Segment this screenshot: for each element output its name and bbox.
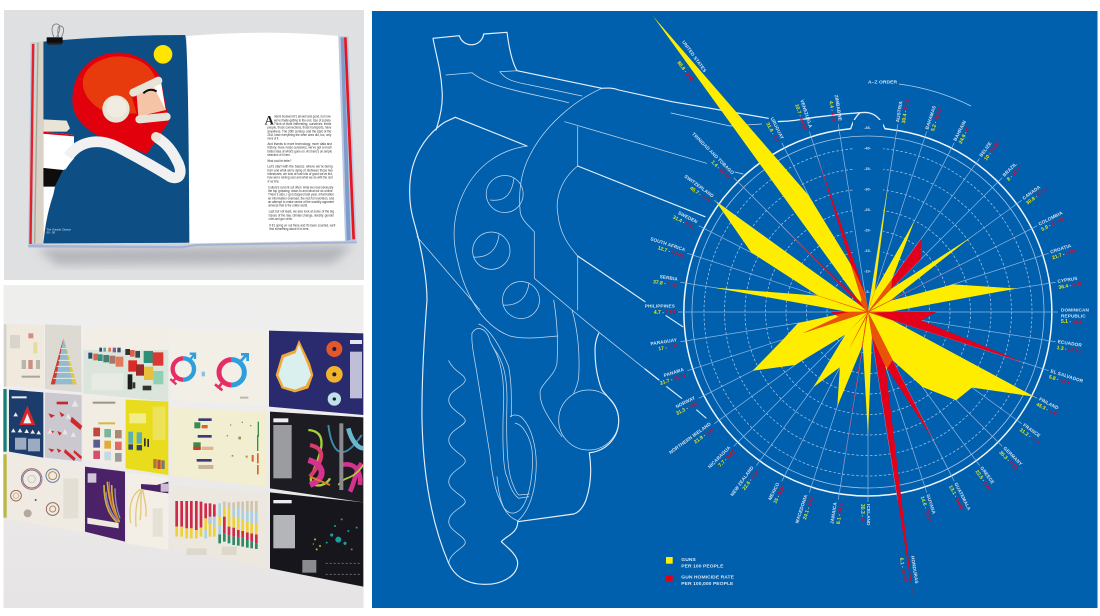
label: Bahamas: BAHAMAS [924, 105, 937, 130]
country labels [645, 40, 1089, 586]
label: Nicaragua [707, 445, 737, 474]
label: Canada: CANADA [1022, 184, 1042, 201]
label: Guatemala: GUATEMALA [953, 482, 972, 512]
label: Iceland [859, 504, 871, 526]
label: Brazil: BRAZIL [1002, 162, 1018, 178]
label: Venezuela [792, 99, 813, 131]
gun thin details [417, 71, 762, 563]
label: Guyana: 14.6 - 13.14 [919, 496, 933, 523]
label: Brazil [1002, 162, 1023, 183]
icon: binder clip [47, 24, 64, 45]
A-Z order arrow: A–Z ORDER [868, 80, 898, 86]
label: Paraguay [650, 337, 679, 354]
label: Macedonia: 24.1 - 1.27 [802, 496, 815, 521]
label: Bahamas [924, 105, 944, 132]
label: El Salvador: 5.8 - 39.9 [1048, 374, 1070, 386]
label: Ecuador [1056, 339, 1083, 355]
label: Croatia [1050, 242, 1076, 261]
label: Mexico [767, 481, 787, 505]
label: Northern Ireland: NORTHERN IRELAND [668, 421, 712, 455]
label: Serbia [653, 273, 679, 289]
label: Zimbabwe: 4.4 - 4.78 [827, 101, 837, 123]
text block: book copy: better idea of what's gone on. As there's an ample [267, 149, 332, 153]
text block: book copy: selection of it here. [267, 153, 291, 157]
label: Panama: PANAMA [663, 367, 685, 378]
label: New Zealand: NEW ZEALAND [730, 465, 755, 497]
text block: book copy [265, 114, 336, 231]
label: France [1018, 422, 1045, 446]
label: Belize [978, 137, 1002, 162]
text block: book copy: Let's start with the basics: where we're being [267, 165, 333, 169]
label: Macedonia: MACEDONIA [794, 494, 809, 524]
label: Austria: AUSTRIA [895, 100, 903, 123]
label: Bahrain: 24.8 - 0 [958, 127, 971, 145]
label: Canada [1022, 183, 1048, 206]
wall sheets, right half [170, 330, 363, 587]
label: Austria: 30.4 - 0.22 [901, 99, 911, 124]
label: Paraguay: PARAGUAY [650, 337, 678, 346]
dashed value rings [704, 148, 1032, 476]
illustration: astronaut: The Outside Chance [47, 227, 72, 231]
text block: book copy: how we're ruining ours and what we do with the rest [267, 176, 333, 180]
label: Uruguay: 31.8 - 3.4 [764, 122, 779, 143]
legend [666, 557, 735, 587]
illustration: revolver line drawing [410, 32, 885, 584]
text block: book copy: Culture's current out often: what we read obviously [268, 185, 334, 189]
label: Jamaica [829, 501, 845, 526]
text block: book copy: There's also, I got stopped last year, information [268, 193, 334, 197]
label: Bahrain: BAHRAIN [952, 119, 967, 142]
label: Croatia: CROATIA [1050, 243, 1072, 255]
label: Trinidad and Tobago: TRINIDAD AND TOBAGO [691, 131, 735, 176]
label: Germany: 30.3 - 0.19 [997, 450, 1019, 471]
label: Canada: 30.8 - 0.51 [1025, 187, 1048, 206]
label: Nicaragua: 7.7 - 5.92 [717, 449, 737, 469]
text block: book copy: anywhere. The 20th century, and the start of the [267, 129, 331, 133]
sheets: dark dot map [270, 492, 363, 587]
panel: book photo [4, 10, 364, 280]
sheets: stacked bar chart [172, 485, 267, 568]
gun bright outline [410, 32, 885, 584]
wall sheets, left half [3, 323, 170, 550]
label: Colombia: COLOMBIA [1038, 210, 1064, 227]
label: Sweden: SWEDEN [677, 210, 699, 225]
label: New Zealand: 22.6 - 0.16 [741, 469, 761, 492]
radial axes [678, 124, 1058, 502]
label: Germany: GERMANY [1002, 446, 1024, 467]
label: France: 31.2 - 0.06 [1018, 427, 1041, 446]
label: Venezuela: 10.7 - 38.97 [793, 103, 807, 131]
sheets: gender symbols [170, 330, 265, 407]
label: Guyana: GUYANA [925, 494, 937, 515]
text block: book copy: an information overload, the rest for invention, and [268, 196, 334, 200]
label: Macedonia [794, 494, 815, 526]
label: South Africa: 12.7 - 17.03 [657, 245, 684, 259]
label: Serbia: 37.8 - 0.46 [653, 279, 677, 289]
text block: book copy: Last but not least, we also look at some of the big [269, 210, 334, 214]
label: Cyprus: CYPRUS [1057, 276, 1078, 284]
label: Northern Ireland: 21.9 - 0.26 [693, 426, 716, 445]
text block: book copy: If it's going on out there and it's been counted, we'll [269, 223, 336, 227]
label: Cyprus [1057, 275, 1083, 291]
radar: gun homicide rate [787, 160, 1025, 599]
label: Honduras [898, 556, 919, 586]
sheets: dark ribbon chart [270, 412, 363, 502]
label: Serbia: SERBIA [659, 274, 679, 282]
label: Greece: 22.5 - 0.26 [974, 469, 993, 492]
label: Zimbabwe: ZIMBABWE [834, 94, 843, 121]
label: Dominican Republic: 5.1 - 16.3 [1061, 319, 1082, 325]
label: Germany [997, 446, 1024, 472]
sheets: dark polar chart [269, 331, 363, 415]
label: United States: 88.8 - 2.97 [676, 60, 695, 83]
label: Jamaica: 8.1 - 39.4 [836, 503, 845, 525]
legend: GUN HOMICIDE RATE [681, 574, 735, 580]
axis scale numbers: -35- [864, 167, 872, 171]
label: Philippines [645, 304, 675, 316]
label: Nicaragua: NICARAGUA [707, 445, 732, 469]
sheets row 2 [3, 389, 168, 475]
label: Greece: GREECE [979, 466, 995, 485]
text block: book copy: the top grossing, down to and what we do online. [268, 189, 333, 193]
panel: revolver radar chart [372, 11, 1098, 608]
label: Panama [658, 367, 687, 387]
radar: guns per 100 people [653, 16, 1034, 437]
label: Jamaica: JAMAICA [829, 501, 838, 524]
text block: book copy: an attempt to make sense of the wonkily apparent [268, 200, 334, 204]
axis scale numbers: -45- [864, 126, 872, 130]
text block: book copy: born and what we're dying of. Between those two [267, 168, 333, 172]
label: Ecuador: ECUADOR [1057, 339, 1083, 348]
label: Zimbabwe [827, 94, 843, 123]
label: Belize: BELIZE [978, 141, 993, 158]
label: Philippines: 4.7 - 8.93 [654, 310, 675, 316]
text block: book copy: A [265, 114, 275, 128]
label: Dominican Republic [1061, 308, 1089, 325]
text block: book copy: issues of the day: climate change, obesity, gender [269, 213, 335, 217]
text block: book copy: we're finally getting to the end. Use of society [274, 118, 331, 122]
legend: PER 100 PEOPLE [681, 564, 724, 570]
label: Colombia [1038, 210, 1067, 233]
label: Finland [1035, 396, 1062, 418]
label: Norway: 31.3 - 0.05 [675, 401, 699, 417]
axis scale numbers [864, 126, 872, 294]
illustration: astronaut [40, 33, 193, 247]
text block: book copy: ndent bookworm's all well and good, but now [274, 115, 331, 119]
legend: GUNS [681, 557, 696, 563]
text block: book copy: Think of most interesting, ourselves, these [274, 122, 331, 126]
axis scale numbers: -20- [864, 228, 872, 232]
axis scale numbers: -15- [864, 249, 872, 253]
label: Iceland: ICELAND [866, 504, 871, 526]
text block: book copy: more of it. [267, 137, 279, 141]
axis scale numbers: -5- [865, 290, 871, 294]
label: France: FRANCE [1022, 422, 1041, 438]
label: Cyprus: 36.4 - 0.46 [1058, 281, 1083, 291]
label: El Salvador [1048, 368, 1084, 391]
label: Austria [895, 98, 911, 124]
label: Bahamas: 5.2 - 15.37 [930, 107, 943, 132]
label: South Africa: SOUTH AFRICA [650, 236, 686, 253]
label: Croatia: 21.7 - 0.39 [1052, 248, 1076, 261]
sheets row 3 [3, 453, 168, 550]
text block: book copy: find something about it in here. [269, 227, 309, 231]
label: El Salvador: EL SALVADOR [1050, 368, 1084, 384]
label: Switzerland: SWITZERLAND [683, 174, 715, 199]
label: South Africa [648, 236, 686, 259]
label: United States [667, 40, 707, 83]
label: Paraguay: 17 - 7.35 [658, 343, 679, 352]
outer white ring [684, 129, 1052, 496]
label: Norway: NORWAY [675, 395, 697, 409]
text block: book copy: 21st, have everything the other ones did, too, only [267, 133, 332, 137]
label: Panama: 21.7 - 16.16 [659, 373, 687, 387]
radar: overlap of guns and homicide [804, 264, 893, 368]
label: Dominican Republic: REPUBLIC [1061, 313, 1086, 318]
label: Mexico: MEXICO [767, 481, 780, 501]
label: Philippines: PHILIPPINES [645, 304, 675, 309]
label: Iceland: 30.3 - 0 [859, 504, 865, 521]
text block: book copy: roles and gun crime. [269, 217, 293, 221]
axis scale numbers: -40- [864, 146, 872, 150]
panel: gallery wall photo [3, 285, 363, 608]
label: Ecuador: 1.3 - 12.73 [1056, 345, 1081, 355]
label: Greece [974, 466, 997, 492]
label: Finland: 45.3 - 0.45 [1035, 402, 1059, 418]
label: Switzerland: 45.7 - 0.77 [688, 185, 711, 205]
label: Trinidad and Tobago: 1.4 - 27.31 [710, 159, 731, 181]
label: Norway [672, 395, 700, 417]
label: Uruguay [763, 116, 785, 144]
text block: book copy: What could be better? [267, 159, 291, 163]
label: Venezuela: VENEZUELA [799, 99, 813, 129]
label: Switzerland [679, 174, 715, 205]
label: Guatemala: 13.1 - 34.81 [947, 484, 965, 511]
sheets row 1 [4, 323, 170, 402]
sheets: cream dot chart [172, 408, 267, 488]
label: Sweden [671, 209, 699, 231]
axis scale numbers: -30- [864, 188, 872, 192]
text block: book copy: milestones, we look at how lots of good we've led, [267, 172, 333, 176]
chart grid [678, 120, 1058, 502]
right page [187, 33, 345, 243]
A-Z order arrow [868, 80, 971, 106]
label: Honduras: HONDURAS [910, 556, 919, 584]
illustration: astronaut: 00 - 00 [47, 231, 55, 235]
axis scale numbers: -10- [864, 270, 872, 274]
label: Uruguay: URUGUAY [769, 116, 785, 141]
legend: PER 100,000 PEOPLE [681, 581, 734, 587]
label: Guyana [919, 494, 939, 523]
label: Honduras: 6.1 - 68.43 [898, 557, 908, 582]
text block: book copy: And thanks to more technology, more data and [267, 142, 332, 146]
label: Sweden: 31.4 - 0.41 [671, 215, 696, 231]
label: United States: UNITED STATES [681, 40, 707, 73]
book shadow [37, 245, 353, 265]
label: Finland: FINLAND [1038, 396, 1060, 411]
book cover and page edges [28, 36, 357, 248]
text block: book copy: universe that is the online world. [268, 204, 308, 208]
label: Bahrain [952, 119, 974, 145]
axis scale numbers: -25- [864, 208, 872, 212]
thin ring [692, 136, 1044, 488]
label: Guatemala [947, 482, 972, 515]
text block: book copy: history, more noisy ourselves, we've got a much [267, 146, 332, 150]
text block: book copy: people, those connections, those transports, have [267, 126, 331, 130]
label: Brazil: 8 - 18.1 [1006, 166, 1022, 183]
label: Dominican Republic: DOMINICAN [1061, 308, 1089, 313]
text block: book copy: of our time. [267, 179, 279, 183]
label: Belize: 10 - 21.82 [983, 140, 1002, 162]
label: Mexico: 15 - 9.97 [772, 484, 787, 505]
label: Colombia: 5.9 - 27.09 [1040, 217, 1065, 233]
